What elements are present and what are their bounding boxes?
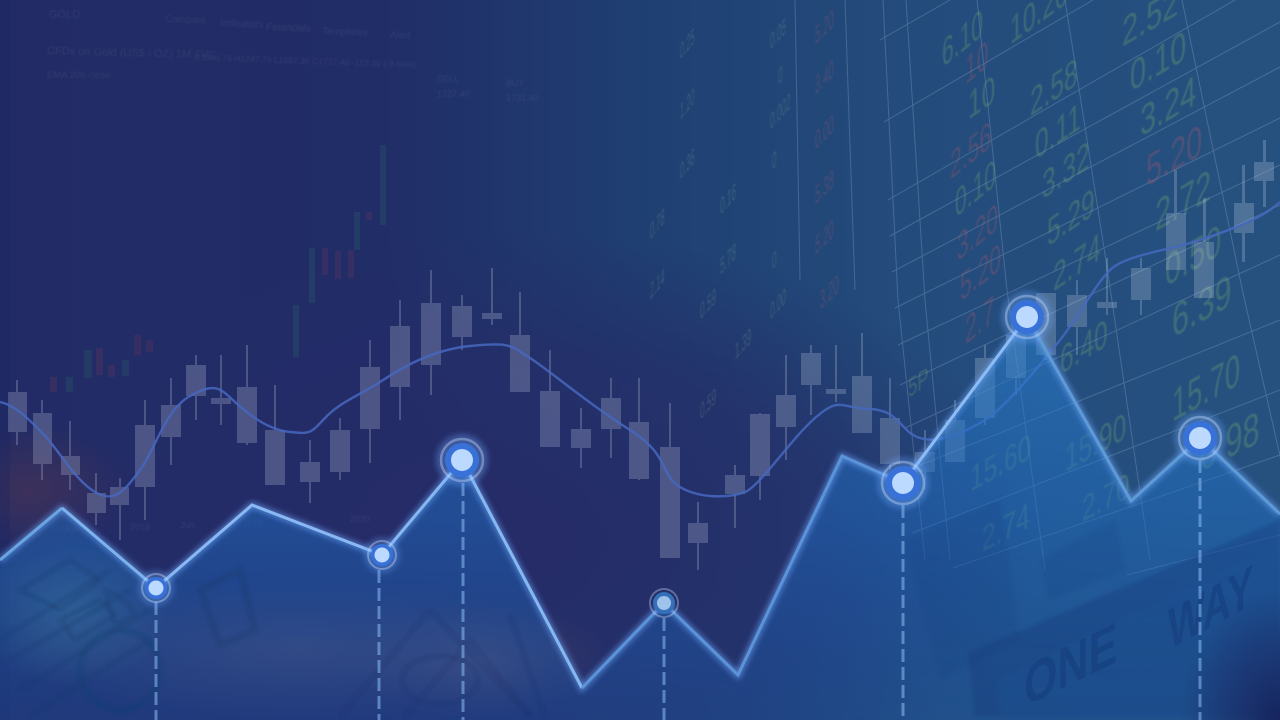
faint trading terminal text: O1574.74 H1747.74 L1557.30 C1727.40 -152.39 (-9.68%) bbox=[194, 52, 416, 70]
faint trading terminal text: BUY bbox=[506, 78, 525, 88]
green price numbers: 2.58 bbox=[1030, 50, 1078, 126]
green price numbers: 0.10 bbox=[1130, 21, 1186, 102]
faint trading terminal text: Templates bbox=[322, 26, 368, 39]
distant number columns: 0.36 bbox=[680, 142, 695, 185]
marker 1 bbox=[138, 570, 174, 606]
green price numbers: 15.90 bbox=[1065, 404, 1126, 480]
faint trading terminal text: 2020 bbox=[350, 514, 370, 524]
red price numbers: 5.20 bbox=[960, 235, 1001, 311]
green price numbers: 3.24 bbox=[1140, 66, 1196, 147]
faint trading terminal text: 1731.40 bbox=[506, 93, 539, 103]
reddish photo tint bottom left bbox=[0, 425, 610, 720]
marker 5 bbox=[877, 457, 929, 509]
green price numbers: 6.10 bbox=[942, 1, 983, 77]
distant number columns: 0.002 bbox=[770, 88, 791, 135]
marker 2 bbox=[364, 537, 400, 573]
faint trading terminal text: 1727.40 bbox=[437, 89, 470, 99]
background dark candlesticks bbox=[50, 145, 386, 392]
data point markers bbox=[138, 291, 1226, 617]
faint trading terminal text: Indicators bbox=[220, 18, 264, 31]
distant red number columns: 5.20 bbox=[815, 214, 834, 261]
faint trading terminal text: Jun bbox=[64, 524, 79, 534]
green price numbers: 15.60 bbox=[970, 426, 1031, 500]
distant red number columns: 3.20 bbox=[820, 269, 839, 316]
area chart outline bbox=[0, 317, 1280, 688]
distant red number columns: 3.40 bbox=[815, 54, 834, 101]
photo: one way sign bbox=[968, 520, 1280, 720]
faint trading terminal text: GOLD bbox=[49, 9, 80, 21]
area chart outline glow bbox=[0, 317, 1280, 688]
marker 7 bbox=[1174, 412, 1226, 464]
red price numbers: 2.56 bbox=[950, 113, 991, 189]
green price numbers: 0.50 bbox=[1165, 214, 1221, 297]
perspective price grid bbox=[795, 0, 1280, 575]
photo: gold bars bbox=[340, 610, 545, 716]
distant number columns: 2.14 bbox=[650, 262, 665, 305]
faint trading terminal text: 2019 bbox=[243, 518, 263, 528]
marker 6 bbox=[1001, 291, 1053, 343]
green price numbers: 2.70 bbox=[1082, 464, 1130, 530]
red price numbers: 10 bbox=[965, 32, 988, 94]
red price numbers: 5.20 bbox=[1146, 114, 1202, 197]
faint trading terminal text: SELL bbox=[437, 74, 459, 84]
distant number columns: 0.05 bbox=[770, 13, 786, 55]
distant number columns bbox=[650, 13, 791, 425]
green price numbers: 6.40 bbox=[1060, 311, 1108, 384]
green price numbers: 5.29 bbox=[1047, 180, 1095, 256]
dashed drop lines bbox=[156, 460, 1200, 720]
area chart fill bbox=[0, 317, 1280, 720]
distant number columns: 1.39 bbox=[735, 323, 751, 365]
green price numbers: 15.70 bbox=[1172, 343, 1240, 433]
distant number columns: 0.59 bbox=[700, 283, 716, 325]
distant red number columns: 0.00 bbox=[815, 109, 834, 156]
distant number columns: 0.78 bbox=[650, 202, 665, 245]
green price numbers bbox=[908, 0, 1260, 560]
distant number columns: 1.20 bbox=[680, 82, 695, 125]
bottom right shading bbox=[1180, 590, 1280, 720]
faint trading terminal text bbox=[47, 9, 539, 534]
green price numbers: 0.98 bbox=[1200, 400, 1260, 482]
photo: one way sign: ONE bbox=[1024, 610, 1117, 720]
distant number columns: 0.59 bbox=[700, 383, 716, 425]
distant number columns: 0.00 bbox=[770, 283, 786, 325]
green price numbers: 2.74 bbox=[982, 494, 1030, 560]
marker 4 bbox=[650, 589, 678, 617]
faint trading terminal text: Jun bbox=[180, 520, 195, 530]
distant number columns: 0.25 bbox=[680, 22, 695, 65]
white candlesticks bbox=[8, 140, 1274, 570]
green price numbers: 6.39 bbox=[1172, 263, 1232, 348]
photo: circuit board bottom left bbox=[0, 535, 255, 716]
faint trading terminal text: Compare bbox=[165, 14, 207, 26]
faint trading terminal text: Alert bbox=[390, 30, 411, 42]
red price numbers: 3.20 bbox=[957, 195, 998, 271]
red price numbers: 2.7 bbox=[965, 288, 994, 354]
distant number columns: 0.16 bbox=[720, 178, 736, 220]
distant red number columns bbox=[815, 4, 839, 316]
distant red number columns: 5.38 bbox=[815, 164, 834, 211]
green price numbers: 0.11 bbox=[1035, 94, 1081, 169]
green price numbers: 2.72 bbox=[1155, 159, 1211, 242]
green price numbers: 0.10 bbox=[955, 151, 996, 227]
faint trading terminal text: CFDs on Gold (US$ / OZ) 1M TVC bbox=[47, 45, 216, 61]
distant number columns: 0 bbox=[772, 245, 777, 275]
marker 3 bbox=[436, 434, 488, 486]
distant red number columns: 5.20 bbox=[815, 4, 834, 51]
red price numbers bbox=[950, 32, 1202, 354]
distant number columns: 0 bbox=[772, 145, 777, 175]
green price numbers: 10 bbox=[968, 67, 995, 129]
moving average line bbox=[0, 202, 1280, 496]
green price numbers: 2.74 bbox=[1053, 225, 1101, 301]
green price numbers: 3.32 bbox=[1042, 133, 1090, 209]
photo: city buildings bbox=[905, 500, 1125, 680]
distant number columns: 0 bbox=[778, 60, 783, 90]
photo: one way sign: WAY bbox=[1168, 553, 1253, 662]
distant number columns: 5.78 bbox=[720, 238, 736, 280]
faint trading terminal text: EMA 200 close bbox=[47, 70, 110, 81]
lower centre darkening bbox=[0, 100, 1040, 720]
left toolbar strip bbox=[0, 0, 10, 720]
faint trading terminal text: Financials bbox=[266, 22, 311, 35]
green price numbers: 5P bbox=[908, 361, 929, 404]
faint trading terminal text: 2018 bbox=[130, 522, 150, 532]
